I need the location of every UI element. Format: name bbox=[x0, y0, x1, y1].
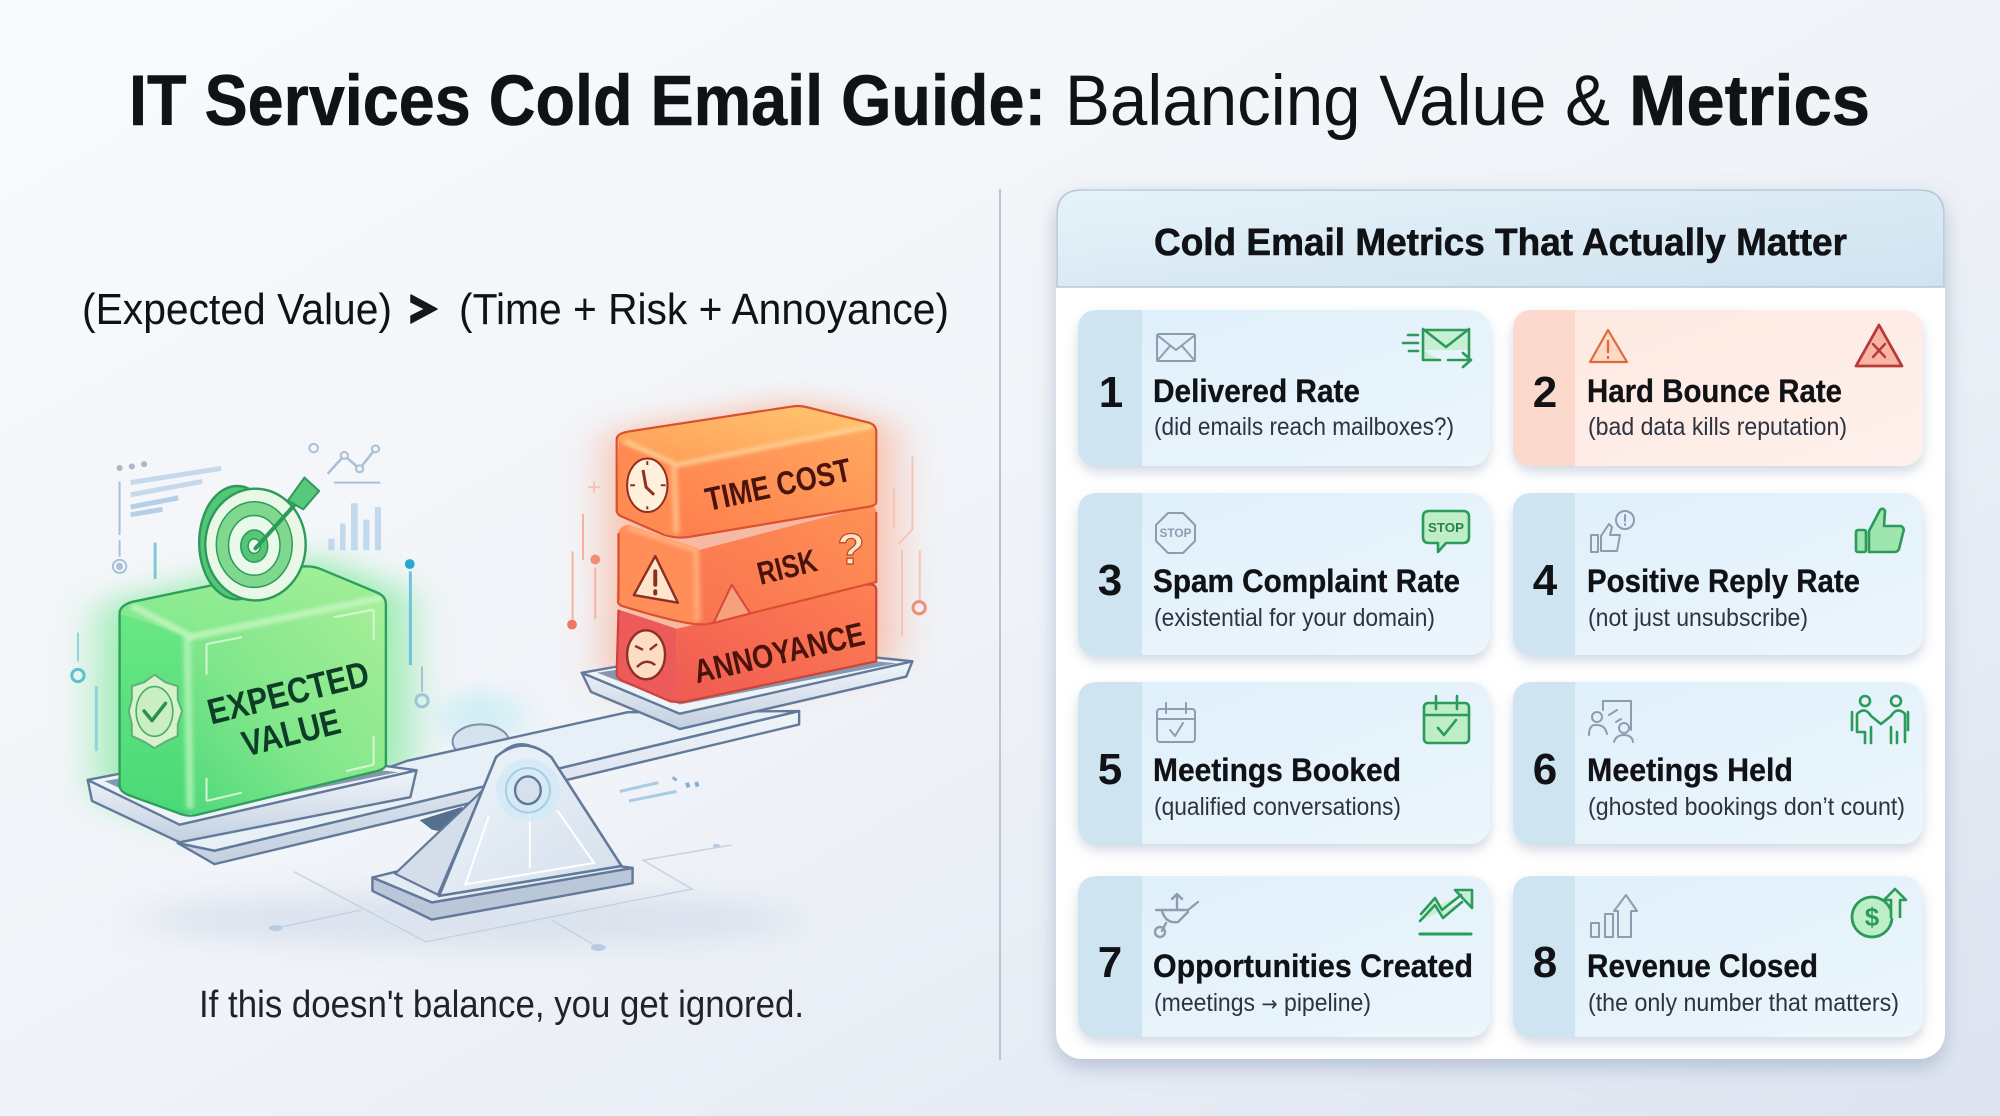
title bbox=[129, 62, 1870, 141]
icon: question mark: ? bbox=[838, 525, 864, 574]
fulcrum pivot disc bbox=[453, 724, 509, 759]
title: IT Services Cold Email Guide: bbox=[129, 62, 1046, 141]
green glow bbox=[101, 556, 407, 828]
badge bbox=[129, 675, 182, 748]
decorative mini bars bbox=[328, 503, 381, 550]
card 6: meetings held: 6 bbox=[1533, 745, 1557, 794]
card 4: positive reply rate: (not just unsubscribe) bbox=[1588, 604, 1808, 632]
label: expected value bbox=[203, 653, 373, 764]
orange glow bbox=[609, 403, 891, 709]
card 2: hard bounce rate: (bad data kills reputation) bbox=[1588, 413, 1847, 441]
card 3: spam complaint rate bbox=[1078, 493, 1490, 655]
formula: (Expected Value) bbox=[82, 285, 392, 334]
orange block top bbox=[617, 406, 876, 538]
warning icon bbox=[634, 556, 678, 603]
formula: (Time + Risk + Annoyance) bbox=[459, 285, 949, 334]
card 7: opportunities created: 7 bbox=[1098, 938, 1122, 987]
orange block middle bbox=[617, 506, 876, 625]
card 2: hard bounce rate: 2 bbox=[1533, 368, 1557, 417]
left pan bbox=[88, 770, 417, 842]
card 1: delivered rate: Delivered Rate bbox=[1153, 373, 1360, 409]
speed dashes bbox=[620, 778, 699, 801]
formula bbox=[82, 285, 949, 334]
card 5: meetings booked: Meetings Booked bbox=[1153, 752, 1401, 788]
orange block bottom bbox=[617, 584, 876, 702]
card 4: positive reply rate bbox=[1513, 493, 1923, 655]
card 8: revenue closed: Revenue Closed bbox=[1587, 948, 1818, 984]
floor lines bbox=[269, 844, 732, 951]
green block bbox=[120, 566, 386, 816]
divider bbox=[999, 189, 1001, 1060]
decorative lines left bbox=[72, 444, 428, 751]
card 3: spam complaint rate: STOP bbox=[1160, 526, 1192, 540]
card 6: meetings held bbox=[1513, 682, 1923, 844]
ground shadow bbox=[138, 893, 799, 946]
card 8: revenue closed bbox=[1513, 876, 1923, 1037]
card 5: meetings booked bbox=[1078, 682, 1490, 844]
caption: If this doesn't balance, you get ignored. bbox=[199, 984, 804, 1026]
card 2: hard bounce rate bbox=[1513, 310, 1923, 466]
card 3: spam complaint rate: Spam Complaint Rate bbox=[1153, 563, 1460, 599]
label: risk: RISK bbox=[754, 542, 820, 592]
card 5: meetings booked: (qualified conversations) bbox=[1154, 793, 1401, 821]
card 6: meetings held: Meetings Held bbox=[1587, 752, 1793, 788]
panel header bbox=[1057, 190, 1944, 287]
base plate bbox=[372, 868, 633, 920]
card 8: revenue closed: (the only number that matters) bbox=[1588, 989, 1899, 1017]
label: expected value: EXPECTED bbox=[203, 653, 373, 732]
card 7: opportunities created: (meetings → pipeline) bbox=[1154, 989, 1371, 1017]
label: time cost: TIME COST bbox=[702, 451, 854, 518]
card 3: spam complaint rate: 3 bbox=[1098, 556, 1122, 605]
label: annoyance: ANNOYANCE bbox=[690, 615, 868, 690]
panel heading: Cold Email Metrics That Actually Matter bbox=[1154, 222, 1847, 264]
card 1: delivered rate: (did emails reach mailboxes?) bbox=[1154, 413, 1454, 441]
fulcrum triangle bbox=[395, 744, 530, 895]
decorative lines right bbox=[567, 457, 925, 636]
target bbox=[199, 486, 306, 600]
card 7: opportunities created: Opportunities Created bbox=[1153, 948, 1473, 984]
illustration: balance scale bbox=[72, 403, 925, 951]
card 5: meetings booked: 5 bbox=[1098, 745, 1122, 794]
panel: metrics bbox=[1056, 189, 1945, 1059]
card 4: positive reply rate: 4 bbox=[1533, 556, 1558, 605]
card 8: revenue closed: $ bbox=[1865, 902, 1880, 932]
card 7: opportunities created bbox=[1078, 876, 1490, 1037]
decorative text lines bbox=[131, 468, 221, 515]
card 3: spam complaint rate: (existential for your domain) bbox=[1154, 604, 1435, 632]
card 6: meetings held: (ghosted bookings don’t count) bbox=[1588, 793, 1905, 821]
right pan bbox=[582, 661, 912, 729]
card 4: positive reply rate: Positive Reply Rate bbox=[1587, 563, 1860, 599]
card 1: delivered rate: 1 bbox=[1099, 368, 1123, 417]
beam bbox=[178, 711, 799, 864]
clock icon bbox=[627, 458, 668, 512]
card 3: spam complaint rate: STOP bbox=[1428, 520, 1464, 535]
sad face icon bbox=[627, 630, 665, 679]
card 1: delivered rate bbox=[1078, 310, 1490, 466]
label: expected value: VALUE bbox=[238, 700, 345, 764]
blue glow bbox=[438, 690, 524, 744]
title: Metrics bbox=[1629, 62, 1870, 141]
title: Balancing Value & bbox=[1065, 62, 1610, 141]
card 8: revenue closed: 8 bbox=[1533, 938, 1557, 987]
card 2: hard bounce rate: Hard Bounce Rate bbox=[1587, 373, 1842, 409]
